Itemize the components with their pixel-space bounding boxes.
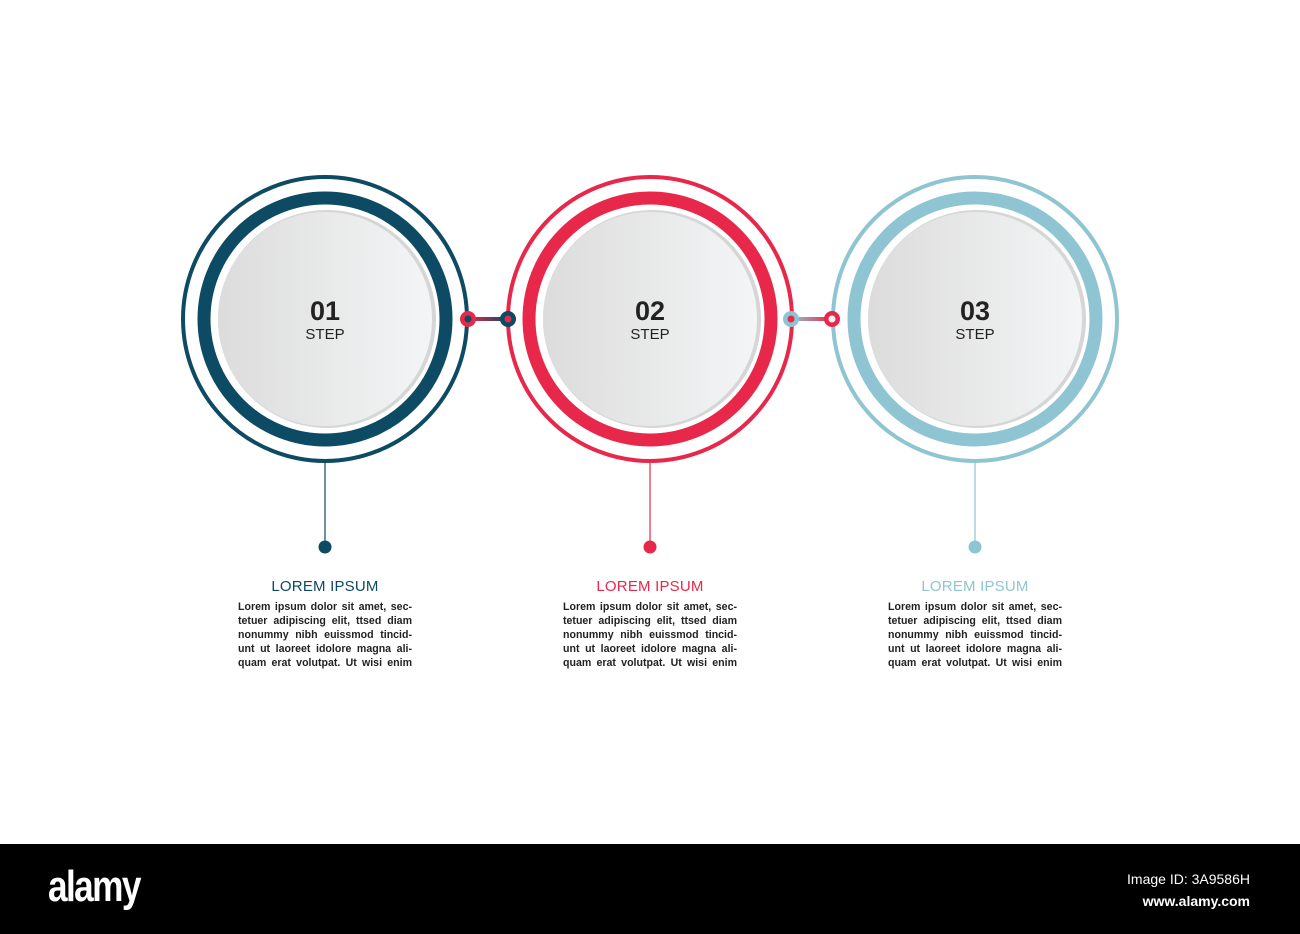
- text block 3: Lorem ipsum dolor sit amet, sec-tetuer adipiscing elit, ttsed diam nonummy nibh euissmod tincid-unt ut laoreet idolore magna ali-quam erat volutpat. Ut wisi enim: [888, 601, 1062, 669]
- footer id: www.alamy.com: [1143, 893, 1250, 909]
- text block 3: LOREM IPSUM: [921, 578, 1029, 595]
- pointer 3: [968, 463, 982, 554]
- pointer 2: [644, 463, 656, 554]
- step 3 circle: [833, 177, 1117, 461]
- step 1 circle: 01: [310, 296, 340, 326]
- text block 1: Lorem ipsum dolor sit amet, sec-tetuer adipiscing elit, ttsed diam nonummy nibh euissmod tincid-unt ut laoreet idolore magna ali-quam erat volutpat. Ut wisi enim: [238, 601, 412, 669]
- connector 2-3: [783, 311, 840, 327]
- step 3 circle: STEP: [955, 326, 995, 343]
- footer logo: alamy: [48, 862, 140, 911]
- pointer 1: [318, 463, 332, 554]
- step 2 circle: 02: [635, 296, 665, 326]
- step 1 circle: [183, 177, 467, 461]
- step 2 circle: STEP: [630, 326, 670, 343]
- footer id: Image ID: 3A9586H: [1127, 871, 1250, 887]
- footer id: [1127, 871, 1250, 909]
- step 3 circle: 03: [960, 296, 990, 326]
- step 1 circle: STEP: [305, 326, 345, 343]
- text block 2: Lorem ipsum dolor sit amet, sec-tetuer adipiscing elit, ttsed diam nonummy nibh euissmod tincid-unt ut laoreet idolore magna ali-quam erat volutpat. Ut wisi enim: [563, 601, 737, 669]
- connector 1-2: [460, 311, 516, 327]
- text block 2: LOREM IPSUM: [596, 578, 704, 595]
- footer bar: [0, 844, 1300, 934]
- text block 1: LOREM IPSUM: [271, 578, 379, 595]
- step 2 circle: [508, 177, 792, 461]
